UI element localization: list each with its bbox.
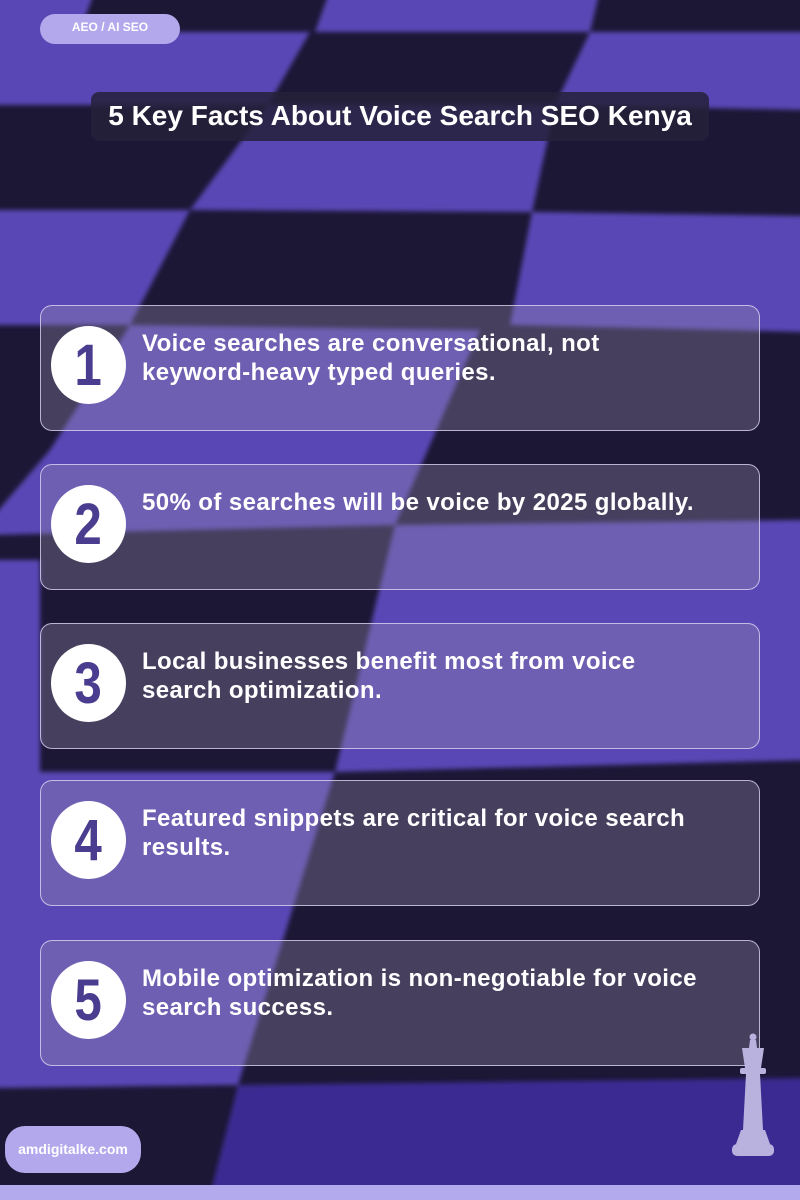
- number badge 1: [51, 326, 126, 404]
- fact text 4: Featured snippets are critical for voice search: [142, 805, 685, 832]
- number badge 1: 1: [75, 333, 102, 398]
- number badge 3: 3: [75, 651, 102, 716]
- title: 5 Key Facts About Voice Search SEO Kenya: [108, 100, 692, 131]
- card 2: [40, 464, 760, 590]
- number badge 5: [51, 961, 126, 1039]
- fact text 3: [142, 648, 635, 704]
- card 5: [40, 940, 760, 1066]
- footer: website pill: [5, 1126, 141, 1173]
- fact text 5: search success.: [142, 994, 333, 1021]
- card 1: [40, 305, 760, 431]
- fact text 4: results.: [142, 834, 231, 861]
- title: [91, 92, 709, 141]
- number badge 3: [51, 644, 126, 722]
- bottom bar: [0, 1185, 800, 1200]
- number badge 5: 5: [75, 968, 102, 1033]
- tag: AEO / AI SEO: AEO / AI SEO: [72, 20, 148, 34]
- number badge 4: [51, 801, 126, 879]
- fact text 5: Mobile optimization is non-negotiable for voice: [142, 965, 697, 992]
- icon: chess queen: [732, 1034, 774, 1156]
- number badge 2: [51, 485, 126, 563]
- fact text 5: [142, 965, 697, 1021]
- card 4: [40, 780, 760, 906]
- fact text 2: 50% of searches will be voice by 2025 globally.: [142, 489, 694, 516]
- fact text 4: [142, 805, 685, 861]
- card 3: [40, 623, 760, 749]
- number badge 4: 4: [75, 808, 102, 873]
- fact text 1: [142, 330, 600, 386]
- number badge 2: 2: [75, 492, 102, 557]
- tag: AEO / AI SEO: [40, 14, 180, 44]
- footer: website pill: amdigitalke.com: [18, 1141, 128, 1157]
- fact text 3: Local businesses benefit most from voice: [142, 648, 635, 675]
- fact text 1: keyword-heavy typed queries.: [142, 359, 496, 386]
- fact text 3: search optimization.: [142, 677, 382, 704]
- fact text 1: Voice searches are conversational, not: [142, 330, 600, 357]
